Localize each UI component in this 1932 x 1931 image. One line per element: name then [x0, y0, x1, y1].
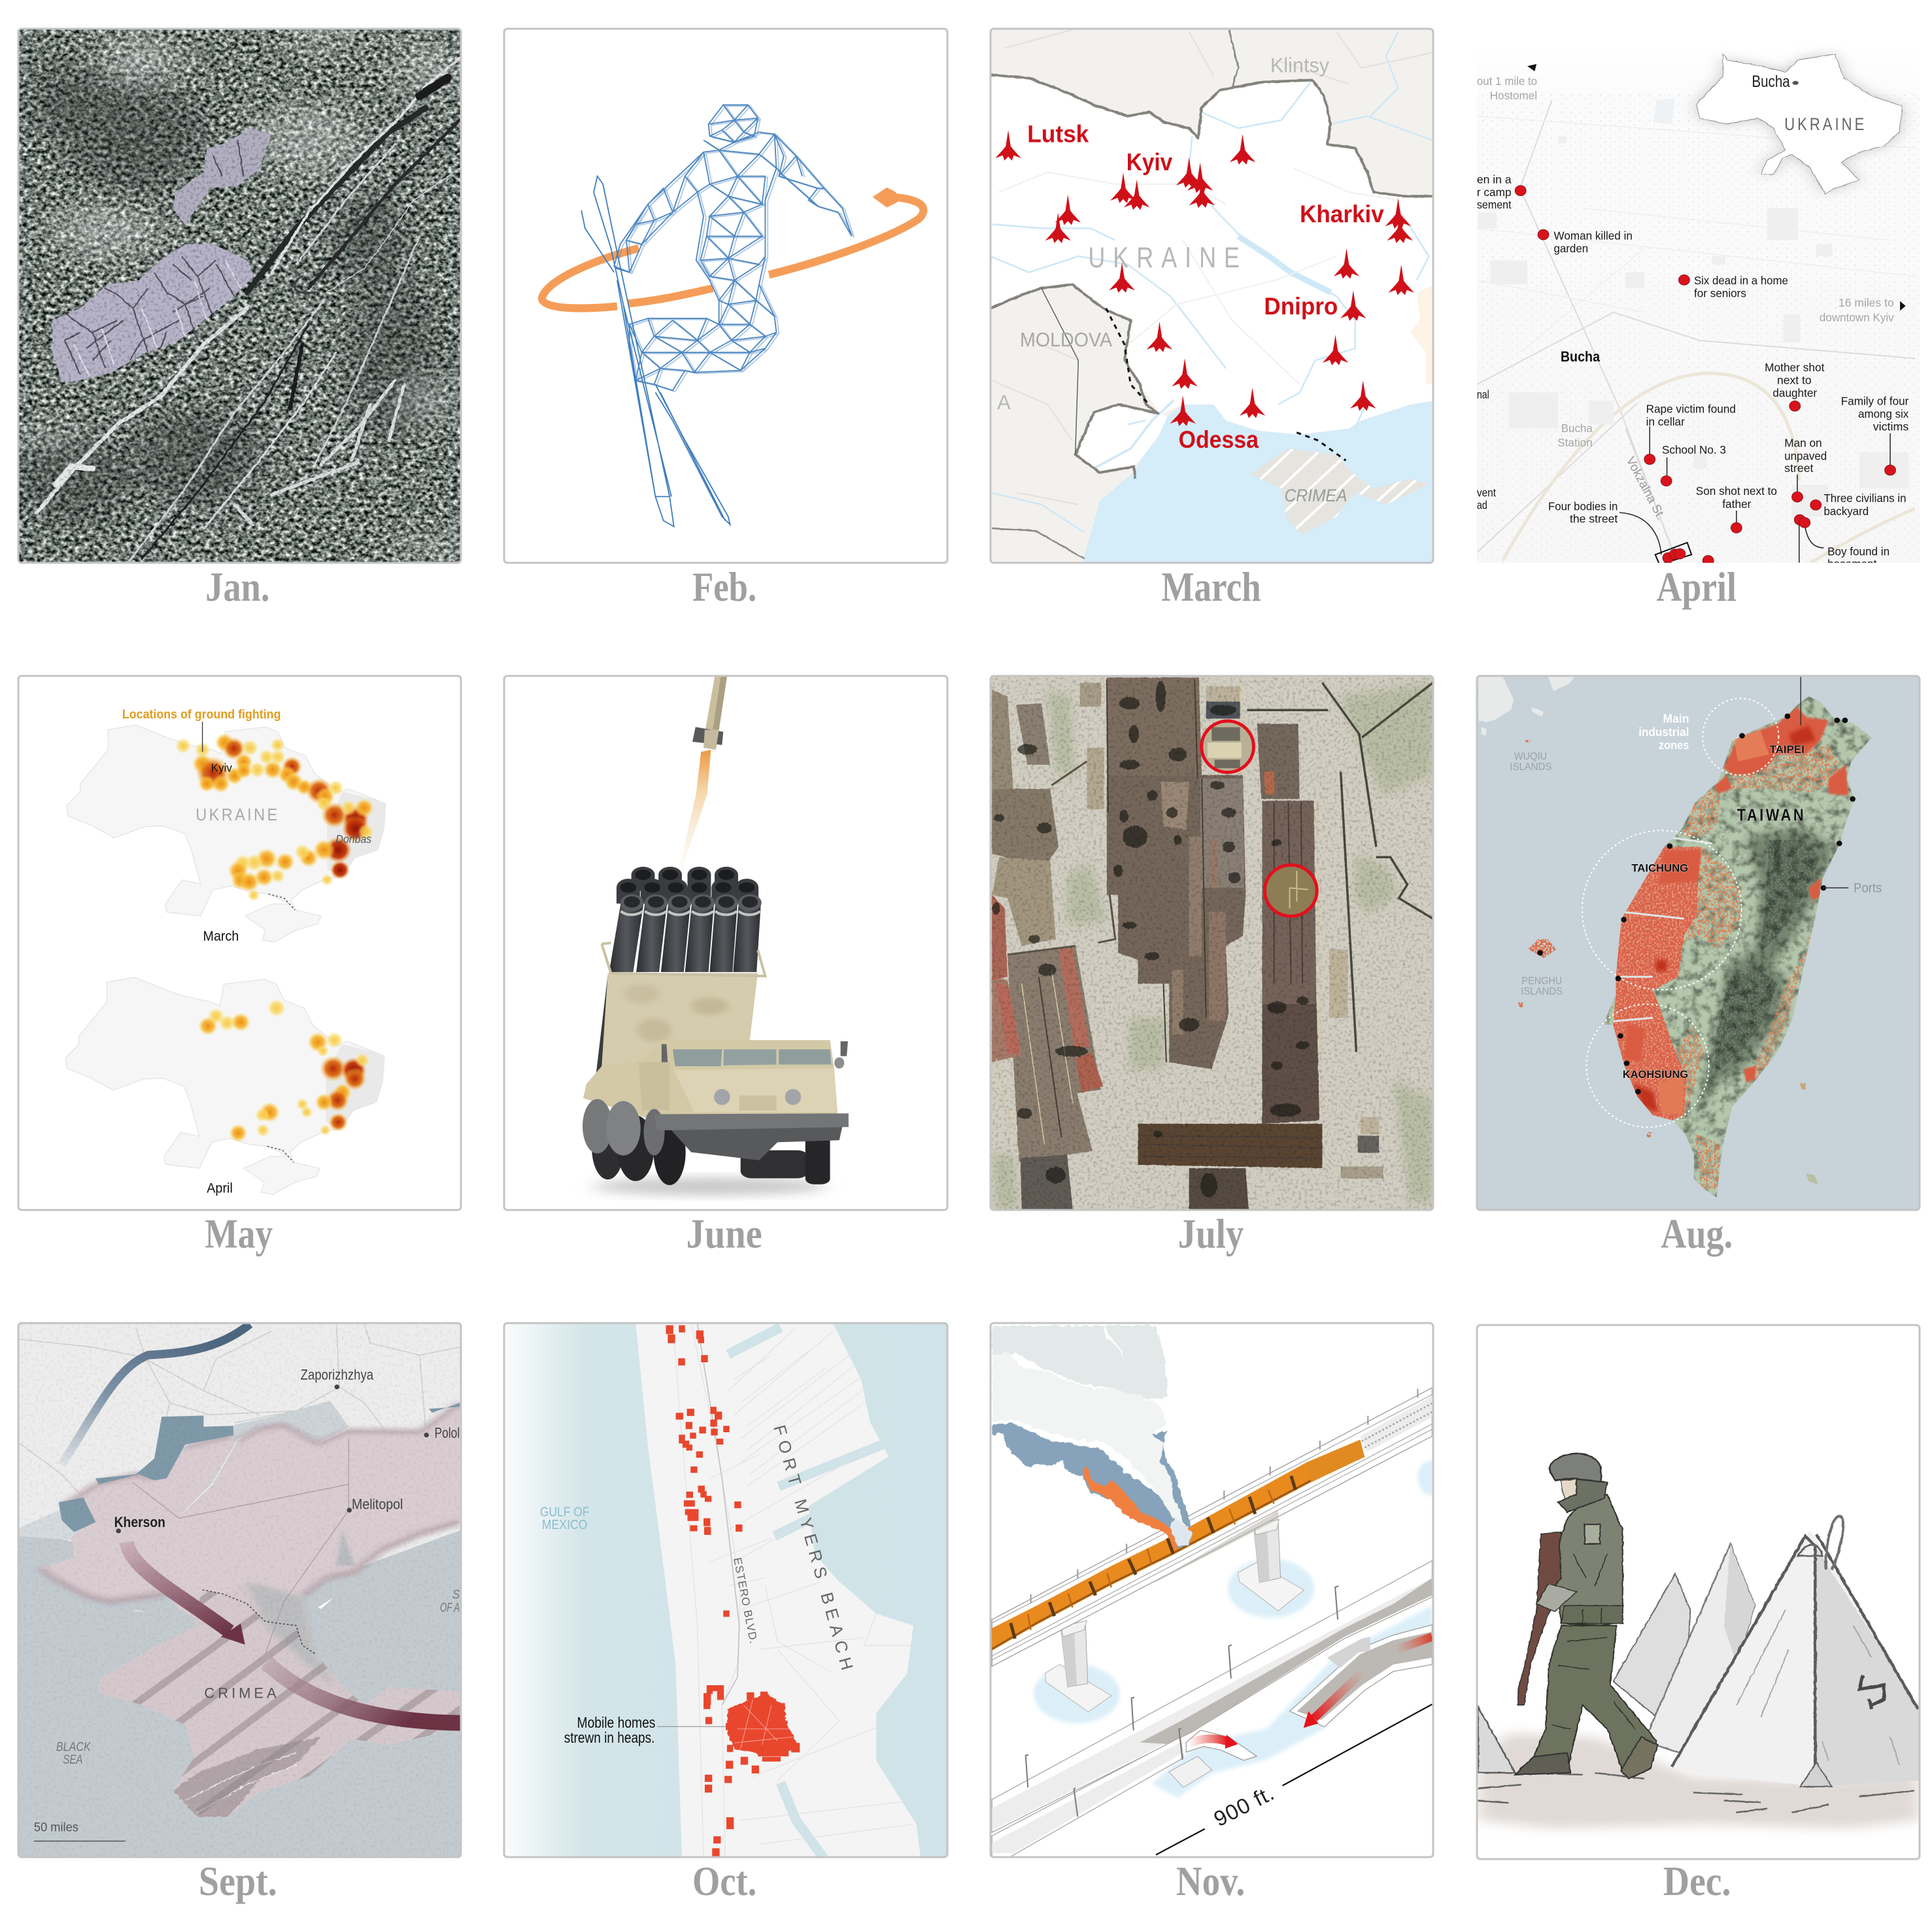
panel: Sept. Crimea and Kherson map: OF A	[440, 1601, 460, 1615]
panel: Aug. Taiwan industrial map: WUQIU	[1514, 751, 1547, 762]
annotations: sement	[1477, 198, 1512, 211]
map labels: TAIPEI	[1770, 744, 1805, 756]
orange orbit arrowhead	[873, 188, 897, 207]
legs	[1515, 1626, 1657, 1777]
map: March: UKRAINE	[195, 806, 280, 824]
small islands	[1518, 740, 1652, 1137]
map labels: SEA	[63, 1753, 82, 1766]
river gaps	[1613, 837, 1712, 1021]
map: March: Locations of ground fighting	[122, 707, 280, 722]
lamp posts	[1026, 1586, 1338, 1817]
annotations: Bucha	[1561, 349, 1601, 365]
scale bar: 50 miles	[34, 1820, 78, 1834]
annotations: victims	[1873, 420, 1908, 433]
gray place labels: out 1 mile to	[1477, 75, 1537, 88]
tank train	[992, 1439, 1364, 1651]
gulf label	[540, 1504, 589, 1532]
green scrub	[993, 682, 1433, 1209]
orange eastern tint	[1410, 284, 1435, 384]
rocket in flight	[679, 677, 727, 868]
boundary	[203, 1590, 316, 1654]
annotations: Six dead in a home	[1694, 274, 1788, 287]
map: March: Kyiv	[211, 762, 233, 775]
satellite forest texture	[18, 29, 461, 563]
snowy pale patches	[22, 26, 463, 561]
roof stripes	[1022, 679, 1322, 1158]
month labels row 3	[199, 1858, 1731, 1904]
annotations: Son shot next to	[1696, 484, 1777, 497]
panel: Aug. Taiwan industrial map: ISLANDS	[1510, 762, 1551, 773]
ground scratches	[1478, 1773, 1915, 1813]
map labels: CRIMEA	[204, 1685, 280, 1702]
panel: Dec. soldier and dragon's teeth	[1477, 1325, 1920, 1859]
city labels: Kyiv	[1127, 149, 1173, 176]
skier mesh	[614, 105, 854, 392]
street names: ESTERO BLVD.	[731, 1556, 760, 1645]
map labels	[56, 1368, 460, 1766]
cities	[116, 1385, 429, 1534]
port markers	[1537, 714, 1856, 1094]
map: April: April	[207, 1181, 233, 1196]
strike markers	[995, 130, 1414, 426]
gray place labels: Station	[1557, 436, 1593, 449]
country and place labels	[997, 54, 1347, 505]
map labels: BLACK	[56, 1740, 91, 1754]
inset Ukraine locator: Bucha	[1752, 73, 1790, 90]
water streaks	[133, 1598, 333, 1613]
month labels row 3: Dec.	[1663, 1858, 1731, 1904]
dirt texture overlay	[991, 676, 1433, 1210]
month labels row 1: April	[1657, 563, 1737, 610]
panel: July satellite view of steel plant	[991, 676, 1433, 1210]
water around piers	[1034, 1460, 1444, 1798]
arrows	[1527, 64, 1536, 71]
highlighted circles	[1202, 721, 1253, 772]
span label: 900 ft.	[1210, 1780, 1278, 1831]
annotations: garden	[1553, 242, 1588, 255]
dusty ground	[1478, 1733, 1920, 1828]
uniform creases	[1552, 1554, 1635, 1729]
lavender dendritic plateau	[52, 128, 271, 382]
damaged homes	[666, 1325, 800, 1858]
dark forest zones	[18, 60, 438, 525]
industrial zones	[1582, 699, 1778, 1127]
annotations: Man on	[1784, 436, 1822, 450]
island land	[636, 1323, 921, 1858]
boots	[1515, 1753, 1570, 1775]
fences	[1247, 682, 1433, 1052]
wheels and chassis	[583, 1099, 849, 1185]
map labels: TAIWAN	[1737, 806, 1806, 825]
gray place labels	[1477, 75, 1894, 449]
ruined plant buildings	[992, 678, 1383, 1209]
panel: Aug. Taiwan industrial map: ISLANDS	[1521, 986, 1563, 998]
map labels: KAOHSIUNG	[1623, 1069, 1688, 1081]
inset Ukraine locator	[1697, 54, 1903, 194]
month labels row 3: Nov.	[1176, 1858, 1245, 1904]
panel: Jan. terrain relief map	[18, 26, 463, 563]
month labels row 3: Sept.	[199, 1858, 277, 1904]
terrain grain overlay	[18, 1323, 461, 1857]
street names	[731, 1423, 857, 1672]
skis	[581, 176, 730, 527]
panel: Aug. Taiwan industrial map: Ports	[1854, 881, 1882, 895]
country and place labels: Klintsy	[1270, 54, 1329, 76]
burn damage	[992, 681, 1310, 1198]
sea	[1083, 401, 1435, 563]
gray place labels: Hostomel	[1490, 89, 1537, 102]
truck cab	[583, 1040, 848, 1120]
occupied territory	[40, 1403, 460, 1618]
city labels: Lutsk	[1027, 121, 1089, 148]
annotations	[1477, 173, 1909, 571]
fallen spans	[1169, 1624, 1432, 1787]
country and place labels: CRIMEA	[1284, 486, 1347, 505]
arrow: across Crimea	[267, 1662, 463, 1723]
ridge texture	[1477, 676, 1920, 1210]
street grid	[673, 1323, 913, 1858]
border lines	[991, 75, 1433, 479]
head	[1549, 1454, 1601, 1483]
pier near	[1045, 1620, 1111, 1712]
leader lines	[1619, 401, 1890, 563]
pier far	[1238, 1520, 1304, 1611]
annotations: in cellar	[1646, 415, 1685, 428]
launcher tubes front row	[609, 869, 762, 972]
annotations: backyard	[1823, 505, 1869, 518]
foreign roads	[992, 28, 1435, 505]
annotations: en in a	[1477, 173, 1512, 186]
panel: Aug. Taiwan industrial map: industrial	[1638, 725, 1689, 739]
month labels row 1	[205, 563, 1737, 610]
map labels: TAICHUNG	[1631, 863, 1688, 875]
month labels row 3: Oct.	[692, 1858, 756, 1904]
mountain shading	[1695, 826, 1834, 1117]
road bridge	[992, 1561, 1432, 1856]
annotations: father	[1722, 497, 1752, 511]
map labels	[1623, 744, 1806, 1081]
panel: March Ukraine strikes map	[991, 28, 1435, 563]
red motion arrows	[1189, 1637, 1432, 1749]
country and place labels: A	[997, 391, 1011, 414]
gulf label: GULF OF	[540, 1504, 589, 1519]
panel: Aug. Taiwan industrial map	[1477, 676, 1920, 1210]
front-line Ukrainian gains	[59, 1403, 460, 1532]
annotations: Woman killed in	[1553, 229, 1633, 242]
callout	[564, 1715, 726, 1747]
dragon's teeth pyramids	[1478, 1516, 1920, 1787]
torso	[1549, 1494, 1623, 1626]
reservoir and lower river	[176, 1401, 348, 1518]
panel: Aug. Taiwan industrial map: PENGHU	[1522, 976, 1562, 987]
city labels	[1027, 121, 1384, 453]
annotations: Rape victim found	[1646, 402, 1736, 415]
month labels row 1: Feb.	[692, 563, 756, 610]
faint streets	[1477, 100, 1915, 557]
Crimea hatching	[25, 1586, 500, 1840]
annotations: the street	[1570, 512, 1618, 525]
map: April	[65, 977, 384, 1196]
pale block texture	[1478, 136, 1908, 516]
rivers	[991, 32, 1432, 533]
span dimension	[1156, 1704, 1432, 1855]
relief and roads	[18, 1323, 460, 1514]
scale bar	[34, 1820, 126, 1841]
map labels: Zaporizhzhya	[301, 1368, 373, 1383]
gulf label: MEXICO	[542, 1517, 588, 1532]
launcher tubes back and middle rows	[617, 867, 758, 903]
annotations: vent	[1477, 486, 1496, 499]
panel: Aug. Taiwan industrial map: Main	[1663, 711, 1689, 726]
annotations: Four bodies in	[1548, 499, 1618, 512]
victim location dots	[1515, 186, 1896, 566]
leader lines	[1801, 676, 1848, 888]
city labels: Kharkiv	[1300, 201, 1384, 227]
Crimea	[99, 1530, 460, 1817]
month labels row 1: Jan.	[205, 563, 269, 610]
annotations: street	[1784, 462, 1814, 475]
panel: Oct. Fort Myers Beach damage map	[504, 1323, 947, 1858]
month labels row 2	[205, 1210, 1733, 1256]
annotations: basement	[1827, 557, 1877, 571]
map labels: Polol	[435, 1425, 460, 1441]
rail bridge deck	[992, 1388, 1432, 1666]
map: March: March	[203, 929, 239, 944]
rifle	[1518, 1532, 1561, 1705]
annotations: unpaved	[1784, 449, 1827, 462]
railing posts	[1031, 1389, 1417, 1604]
country and place labels: UKRAINE	[1088, 242, 1247, 274]
highlight box	[1655, 543, 1691, 565]
callout: strewn in heaps.	[564, 1730, 654, 1747]
orange orbit behind skier	[542, 197, 923, 308]
green base	[1477, 676, 1920, 1210]
scattered orange development	[1670, 745, 1846, 1188]
mainland islets	[1478, 676, 1575, 736]
panel: Sept. Crimea and Kherson map	[17, 1323, 500, 1857]
map labels: Melitopol	[352, 1496, 403, 1513]
map: March	[67, 707, 386, 944]
ground shadow	[592, 1177, 827, 1195]
street names: FORT MYERS BEACH	[770, 1423, 857, 1672]
month labels row 2: May	[205, 1211, 273, 1256]
map labels: Kherson	[114, 1515, 165, 1530]
panel: Aug. Taiwan industrial map: zones	[1659, 738, 1689, 752]
street name: Vokzalna St.	[1623, 454, 1668, 522]
arrow: Kherson to Crimea	[126, 1542, 245, 1645]
country and place labels: MOLDOVA	[1020, 329, 1112, 351]
arrow: northern front	[61, 1324, 250, 1464]
city labels: Odessa	[1179, 426, 1259, 453]
city labels: Dnipro	[1264, 293, 1338, 320]
annotations: ad	[1477, 498, 1487, 511]
annotations: r camp	[1477, 186, 1512, 199]
launcher box	[594, 943, 765, 1094]
panel: June rocket launcher	[504, 676, 947, 1210]
month labels row 2: June	[686, 1211, 762, 1256]
annotations: for seniors	[1694, 286, 1746, 299]
gray place labels: Bucha	[1561, 422, 1593, 435]
dark ridgeline and valleys	[37, 58, 460, 561]
annotations: nal	[1477, 388, 1489, 401]
Ukraine land	[991, 75, 1435, 473]
month labels row 1: March	[1161, 563, 1261, 610]
Taiwan island	[1477, 676, 1920, 1210]
annotations: School No. 3	[1662, 443, 1726, 456]
panel: Feb. wireframe skier	[537, 104, 927, 528]
annotations: Boy found in	[1827, 545, 1890, 558]
upper land	[17, 1323, 461, 1586]
month labels row 2: Aug.	[1661, 1210, 1733, 1256]
callout: Mobile homes	[577, 1715, 655, 1731]
Crimea hatched	[1251, 437, 1429, 545]
annotations: next to	[1777, 373, 1812, 386]
map labels: S	[452, 1587, 460, 1602]
gray place labels: 16 miles to	[1839, 296, 1894, 309]
month labels row 2: July	[1178, 1210, 1244, 1256]
smoke plume	[992, 1326, 1192, 1551]
annotations: daughter	[1772, 386, 1817, 399]
developed lowlands	[1613, 847, 1701, 1120]
panel: May ground fighting maps	[18, 676, 461, 1210]
fine grain overlay	[18, 29, 461, 563]
road lines	[133, 1439, 348, 1653]
panel: April Bucha map	[1477, 46, 1920, 571]
canals	[728, 1327, 889, 1858]
map: March: Donbas	[335, 833, 371, 846]
soldier	[1515, 1454, 1657, 1779]
annotations: Mother shot	[1765, 361, 1825, 374]
panel: Nov. bridge illustration	[991, 1323, 1444, 1857]
